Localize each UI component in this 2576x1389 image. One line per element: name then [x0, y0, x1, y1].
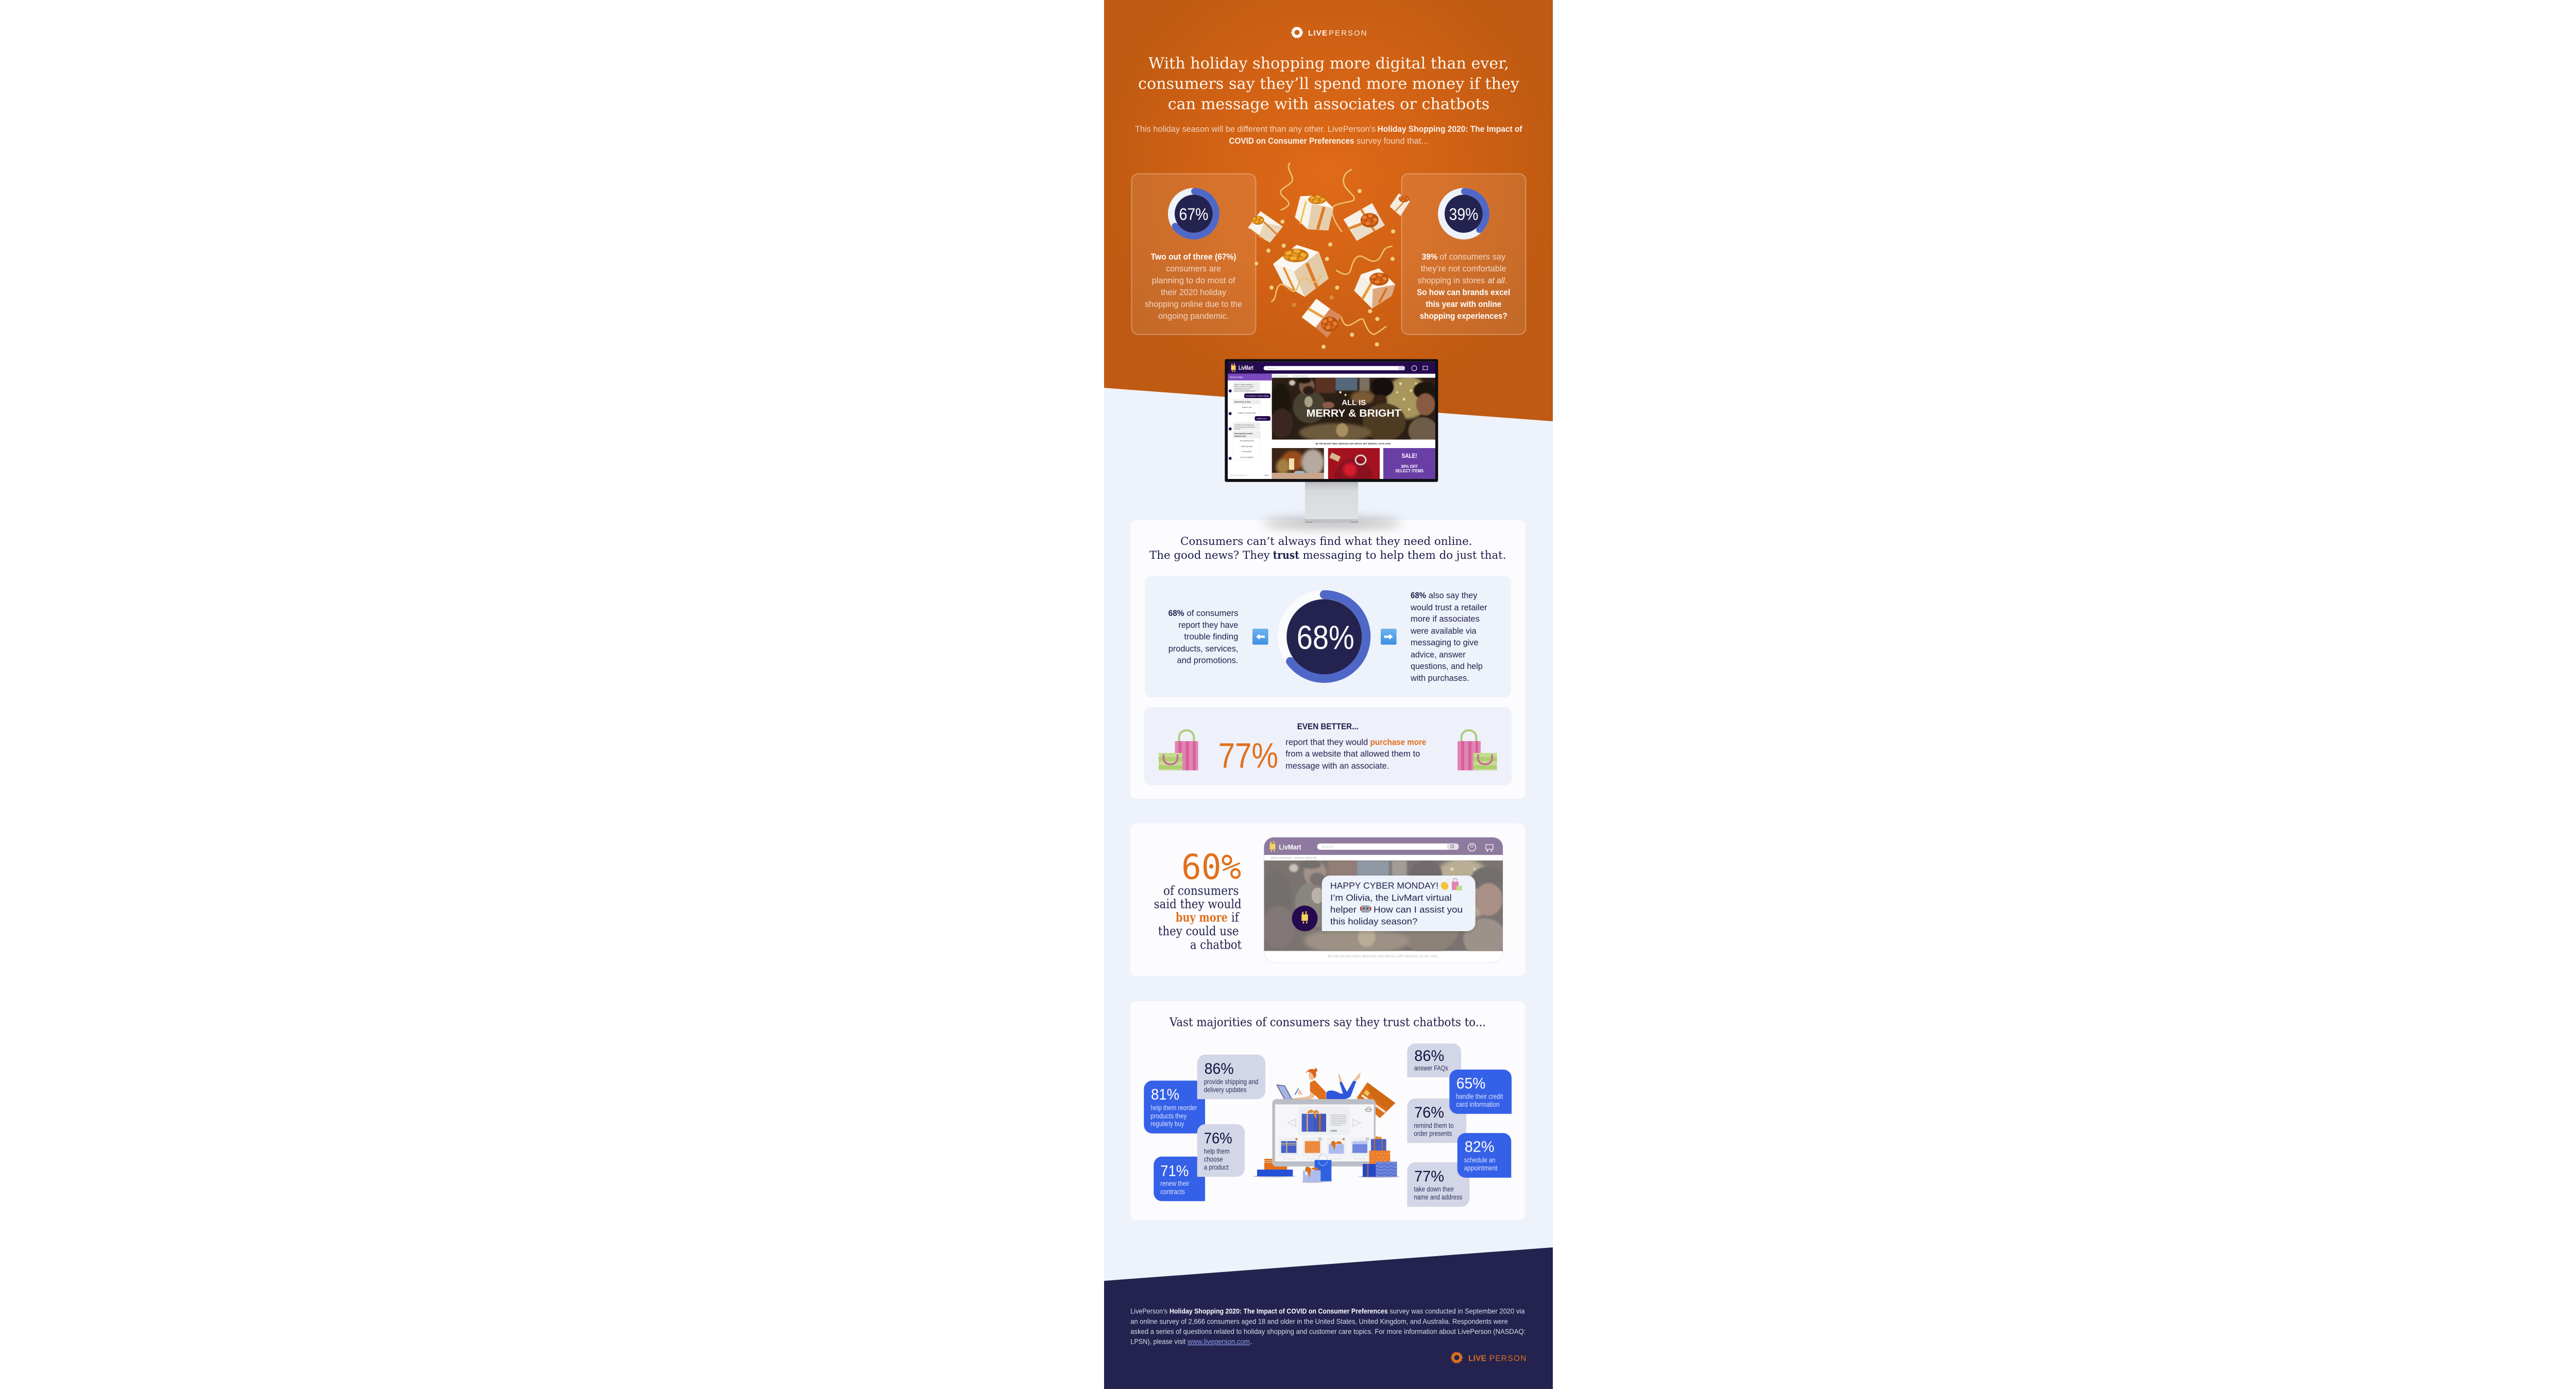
- browser mockup: Shop by Department: [1270, 856, 1292, 859]
- callout: 76% presents: [1407, 1099, 1466, 1143]
- text: purchase more: [1285, 738, 1426, 770]
- gift stack right: [1358, 1136, 1400, 1178]
- donut: 68%: 68%: [1297, 619, 1354, 656]
- footer text: Holiday Shopping 2020: The Impact of COVID on Consumer Preferences: [1170, 1307, 1388, 1315]
- chat bubble: I’m Olivia, the LivMart virtual: [1330, 893, 1452, 903]
- chat sidebar: Send: [1264, 474, 1268, 476]
- site navigation bar: SEARCH: [1267, 367, 1276, 370]
- text: left 68%: products, services,: [1168, 644, 1239, 654]
- callout: 76% choose: [1197, 1124, 1245, 1177]
- text: right 68%: also say they: [1429, 591, 1478, 601]
- callout: 81% reorder: products they: [1150, 1112, 1187, 1120]
- callout: 76% choose: help them: [1204, 1147, 1230, 1155]
- text: left 68%: trouble finding: [1184, 632, 1238, 642]
- text: right 68%: messaging to give: [1411, 638, 1479, 647]
- callout: 65% credit card: [1449, 1070, 1512, 1114]
- site navigation bar: [1228, 362, 1435, 374]
- text: 39% description: So how can brands excel: [1417, 288, 1510, 297]
- browser navigation: [1264, 837, 1503, 855]
- chat sidebar: A gift for someone else: [1238, 412, 1256, 414]
- chat sidebar: assist you this holiday season?: [1234, 390, 1256, 392]
- chat sidebar: A gift for you: [1242, 406, 1252, 408]
- callout: 76% choose: a product: [1204, 1163, 1229, 1171]
- heading: Consumers can’t always find what they need online.: [1180, 535, 1472, 548]
- text: right 68%: [1410, 591, 1487, 683]
- title: consumers say they’ll spend more money if they: [1138, 75, 1519, 93]
- intro text: This holiday season will be different than any other. LivePerson’s: [1135, 125, 1376, 134]
- text: 39% description: of consumers say: [1439, 252, 1506, 262]
- intro text: survey found that...: [1357, 136, 1428, 146]
- text: 67% description: their 2020 holiday: [1161, 288, 1227, 297]
- chat sidebar: A little important: [1241, 445, 1252, 448]
- callout: 86% FAQs: [1407, 1043, 1461, 1077]
- text: 39% description: .: [1505, 276, 1507, 285]
- product tile: sale: 30% OFF: [1401, 464, 1418, 469]
- icon: shopping bags right: [1458, 730, 1497, 770]
- text: buy more: if: [1231, 910, 1240, 924]
- footer text: [1130, 1307, 1526, 1346]
- panel: 60% chatbot: [1130, 824, 1526, 976]
- browser navigation: LivMart: [1279, 843, 1301, 851]
- footer text: www.liveperson.com: [1187, 1337, 1250, 1346]
- panel: 39% stat card: [1401, 174, 1526, 335]
- callout: 77% name and address: name and address: [1414, 1193, 1463, 1201]
- footer text: asked a series of questions related to holiday shopping and customer care topics. For more information about LivePerson (NASDAQ:: [1130, 1327, 1526, 1335]
- chat bubble: [1322, 876, 1476, 932]
- product tile: sale: SELECT ITEMS: [1395, 469, 1424, 473]
- callout: 77% name and address: [1407, 1162, 1469, 1207]
- callout: 81% reorder: regularly buy: [1150, 1120, 1184, 1128]
- callout: 76% presents: order presents: [1414, 1130, 1452, 1138]
- donut: 67%: 67%: [1179, 205, 1209, 224]
- panel: 67% stat card: [1131, 174, 1256, 335]
- text: purchase more: report that they would: [1285, 738, 1368, 747]
- text: 67% description: ongoing pandemic.: [1158, 312, 1229, 321]
- chat sidebar: HAPPY CYBER MONDAY!: [1234, 384, 1253, 386]
- illustration: falling gift boxes and ribbons: [1248, 163, 1410, 349]
- chat sidebar: quality to you?: [1234, 435, 1246, 437]
- product tile: sale: SALE!: [1402, 452, 1417, 459]
- icon: waving hand: [1439, 881, 1450, 891]
- text: 39% description: [1417, 252, 1510, 321]
- illustration: desktop monitor with LivMart site: [1225, 359, 1438, 529]
- gift: large centre: [1273, 245, 1329, 297]
- callout: 82% appointment: [1458, 1133, 1511, 1178]
- heading: trust: [1273, 549, 1299, 562]
- callout: 71% renew: [1154, 1157, 1205, 1201]
- callout: 86% shipping: 86%: [1205, 1060, 1234, 1077]
- chat sidebar: not just treating someone else: [1234, 426, 1255, 428]
- footer text: LPSN), please visit: [1130, 1337, 1185, 1346]
- callout: 81% reorder: [1144, 1081, 1205, 1134]
- gift: top centre: [1295, 195, 1333, 231]
- hero banner: [1272, 375, 1435, 440]
- credit card: [1357, 1083, 1395, 1118]
- callout: 86% FAQs: 86%: [1414, 1048, 1444, 1065]
- product tile: sale: [1383, 448, 1435, 479]
- browser mockup: [1261, 837, 1506, 963]
- text: left 68%: 68%: [1168, 609, 1184, 618]
- hero banner: MERRY & BRIGHT: [1307, 408, 1401, 419]
- text: 39% description: they’re not comfortable: [1421, 264, 1506, 273]
- callout: 76% choose: 76%: [1204, 1130, 1232, 1147]
- text: buy more: a chatbot: [1190, 937, 1242, 952]
- callout: 65% credit card: handle their credit: [1456, 1092, 1503, 1100]
- callout: 82% appointment: appointment: [1464, 1164, 1498, 1172]
- heading: messaging to help them do just that.: [1302, 549, 1506, 562]
- callout: 81% reorder: 81%: [1151, 1086, 1179, 1103]
- heading: Vast majorities of consumers say they trust chatbots to...: [1169, 1015, 1486, 1029]
- chat sidebar: It's important: [1242, 451, 1251, 453]
- chat sidebar: I'm happy to hear that you're: [1234, 424, 1254, 426]
- callout: 86% FAQs: answer FAQs: [1414, 1064, 1448, 1072]
- woman: [1277, 1067, 1361, 1100]
- footer band: [1104, 1247, 1553, 1389]
- icon: robot: [1360, 905, 1371, 913]
- chatbot avatar: [1292, 905, 1318, 931]
- callout: 81% reorder: help them reorder: [1150, 1104, 1197, 1112]
- logo: LivePerson header: PERSON: [1329, 29, 1366, 38]
- title: With holiday shopping more digital than ever,: [1148, 55, 1509, 73]
- text: purchase more: message with an associate.: [1285, 761, 1389, 770]
- logo: LivePerson header: [1292, 27, 1366, 38]
- chat sidebar: Type a message here: [1230, 474, 1248, 476]
- icon: left arrow: [1252, 629, 1268, 645]
- chat sidebar: Virtual Helper: [1229, 376, 1244, 379]
- text: right 68%: would trust a retailer: [1410, 603, 1487, 612]
- stat: 77%: 77%: [1218, 736, 1278, 776]
- gift: right middle: [1344, 203, 1385, 241]
- logo: LivePerson footer: [1451, 1352, 1526, 1363]
- text: left 68%: [1168, 609, 1239, 665]
- intro text: Holiday Shopping 2020: The Impact of: [1378, 125, 1522, 134]
- callout: 76% choose: choose: [1204, 1155, 1223, 1163]
- callout: 76% presents: remind them to: [1414, 1122, 1454, 1129]
- text: even better: EVEN BETTER...: [1297, 722, 1359, 731]
- hero banner: My Store: Jersey City: [1293, 375, 1308, 377]
- infographic: [1104, 0, 1553, 1389]
- intro text: [1135, 125, 1522, 146]
- chat sidebar: It's very important: [1240, 456, 1253, 458]
- text: right 68%: 68%: [1411, 591, 1426, 601]
- chat sidebar: A gift for you: [1257, 418, 1266, 420]
- chat sidebar: this year!: [1234, 428, 1241, 430]
- chat sidebar: I'm looking for a smart display: [1246, 395, 1269, 397]
- gifts left of screen: [1253, 1159, 1296, 1177]
- footer text: survey was conducted in September 2020 via: [1389, 1307, 1525, 1315]
- icon: shopping bags left: [1159, 730, 1198, 770]
- title: can message with associates or chatbots: [1168, 95, 1489, 113]
- sub-panel: 77% stat: [1144, 707, 1512, 785]
- text: purchase more: from a website that allowed them to: [1285, 749, 1420, 759]
- text: 67% description: [1145, 252, 1242, 321]
- text: buy more: buy more: [1176, 910, 1228, 924]
- footer text: an online survey of 2,666 consumers aged 18 and older in the United States, United Kingdom, and Australia. Respondents were: [1130, 1317, 1508, 1325]
- stat: 60%: 60%: [1181, 847, 1241, 887]
- callout: 76% presents: 76%: [1414, 1104, 1444, 1121]
- gift: small left: [1248, 211, 1283, 243]
- browser mockup: My Store: Jersey City: [1295, 856, 1317, 859]
- intro text: COVID on Consumer Preferences: [1229, 136, 1354, 146]
- footer text: LivePerson’s: [1130, 1307, 1167, 1315]
- text: right 68%: more if associates: [1411, 614, 1480, 624]
- sub-panel: 68% stat: [1145, 576, 1511, 697]
- text: left 68%: report they have: [1178, 621, 1238, 630]
- callout: 65% credit card: 65%: [1456, 1075, 1485, 1092]
- browser navigation: SEARCH: [1321, 846, 1334, 849]
- callout: 82% appointment: schedule an: [1464, 1156, 1496, 1164]
- hero banner: Shop by Department: [1274, 375, 1288, 377]
- browser mockup: BE THE HOLIDAY HERO. MESSAGE OUR VIRTUAL GIFT SIDEKICK, OLIVIA, NOW.: [1328, 955, 1438, 958]
- monitor stand: [1305, 482, 1358, 523]
- callout: 71% renew: renew their: [1160, 1180, 1190, 1188]
- text: right 68%: questions, and help: [1411, 662, 1483, 671]
- text: 39% description: at all: [1488, 276, 1505, 285]
- gift: right lower: [1354, 268, 1395, 308]
- title: [1138, 55, 1519, 113]
- panel: consumers trust messaging: [1130, 520, 1526, 799]
- chat bubble: How can I assist you: [1374, 904, 1463, 915]
- text: 39% description: shopping in stores: [1418, 276, 1485, 285]
- callout: 86% shipping: provide shipping and: [1204, 1078, 1258, 1086]
- text: 39% description: shopping experiences?: [1420, 312, 1507, 321]
- panel: trust chatbots: [1130, 1001, 1525, 1220]
- callout: 71% renew: 71%: [1160, 1162, 1189, 1179]
- text: 67% description: shopping online due to the: [1145, 300, 1242, 309]
- faded hero photo: [1264, 860, 1503, 951]
- text: 67% description: consumers are: [1166, 264, 1221, 273]
- callout: 82% appointment: 82%: [1465, 1139, 1495, 1156]
- shopping bag and box: [1301, 1154, 1332, 1183]
- donut: 39%: 39%: [1449, 205, 1479, 224]
- text: 39% description: 39%: [1422, 252, 1437, 262]
- illustration: woman shopping on screen: [1253, 1067, 1400, 1183]
- ribbon over large gift: [1272, 275, 1320, 301]
- text: left 68%: and promotions.: [1177, 656, 1239, 665]
- text: buy more: of consumers: [1163, 883, 1239, 898]
- logo: LivePerson header: LIVE: [1308, 29, 1327, 38]
- heading: [1149, 535, 1506, 562]
- icon: right arrow: [1381, 629, 1397, 645]
- chat sidebar: Not important at all: [1240, 440, 1254, 442]
- chat sidebar: [1228, 374, 1272, 476]
- promo strip: BE THE HOLIDAY HERO. MESSAGE OUR VIRTUAL GIFT SIDEKICK, OLIVIA, NOW.: [1316, 442, 1391, 445]
- chat bubble: HAPPY CYBER MONDAY!: [1330, 881, 1438, 891]
- chat bubble: helper: [1330, 904, 1357, 915]
- chat sidebar: Now tell me, is this...: [1234, 401, 1251, 403]
- text: 67% description: Two out of three (67%): [1151, 252, 1236, 262]
- page background: [1104, 0, 1553, 1389]
- text: buy more: said they would: [1154, 896, 1242, 911]
- callout: 86% shipping: [1197, 1055, 1265, 1099]
- text: buy more: [1154, 883, 1242, 952]
- donut: 68%: [1278, 590, 1370, 683]
- product tile: candle photo: [1272, 448, 1324, 479]
- text: 39% description: this year with online: [1426, 300, 1501, 309]
- logo: LivePerson footer: PERSON: [1489, 1354, 1526, 1363]
- chat sidebar: How important is audio: [1234, 433, 1252, 435]
- chat sidebar: Sorry I'm Olivia, the LivMart: [1234, 386, 1253, 388]
- callout: 77% name and address: 77%: [1414, 1168, 1444, 1185]
- callout: 86% shipping: delivery updates: [1204, 1086, 1247, 1094]
- monitor screen: [1225, 359, 1438, 482]
- product tile: ring on ornament: [1328, 448, 1380, 479]
- donut: 67%: [1168, 188, 1219, 239]
- site navigation bar: LivMart: [1239, 365, 1253, 371]
- gift: tiny right: [1389, 193, 1410, 216]
- callout: 71% renew: contracts: [1160, 1188, 1185, 1195]
- footer text: .: [1250, 1337, 1252, 1346]
- hero banner: ALL IS: [1342, 399, 1366, 407]
- text: buy more: they could use: [1158, 923, 1239, 938]
- text: left 68%: of consumers: [1187, 609, 1239, 618]
- text: 67% description: planning to do most of: [1152, 276, 1235, 285]
- gift: bottom: [1302, 299, 1341, 338]
- screen: [1272, 1099, 1376, 1167]
- chat sidebar: virtual helper. How can I: [1234, 388, 1251, 390]
- text: right 68%: with purchases.: [1410, 674, 1469, 683]
- heading: The good news? They: [1149, 549, 1270, 562]
- icon: shopping bag: [1452, 879, 1462, 890]
- chat bubble: this holiday season?: [1330, 916, 1418, 927]
- callout: 65% credit card: card information: [1456, 1101, 1500, 1108]
- text: right 68%: advice, answer: [1411, 650, 1466, 660]
- text: purchase more: purchase more: [1370, 738, 1426, 747]
- callout: 77% name and address: take down their: [1414, 1185, 1454, 1193]
- orange header band: [1104, 0, 1553, 421]
- donut: 39%: [1438, 188, 1489, 239]
- logo: LivePerson footer: LIVE: [1468, 1354, 1486, 1363]
- text: right 68%: were available via: [1410, 627, 1477, 636]
